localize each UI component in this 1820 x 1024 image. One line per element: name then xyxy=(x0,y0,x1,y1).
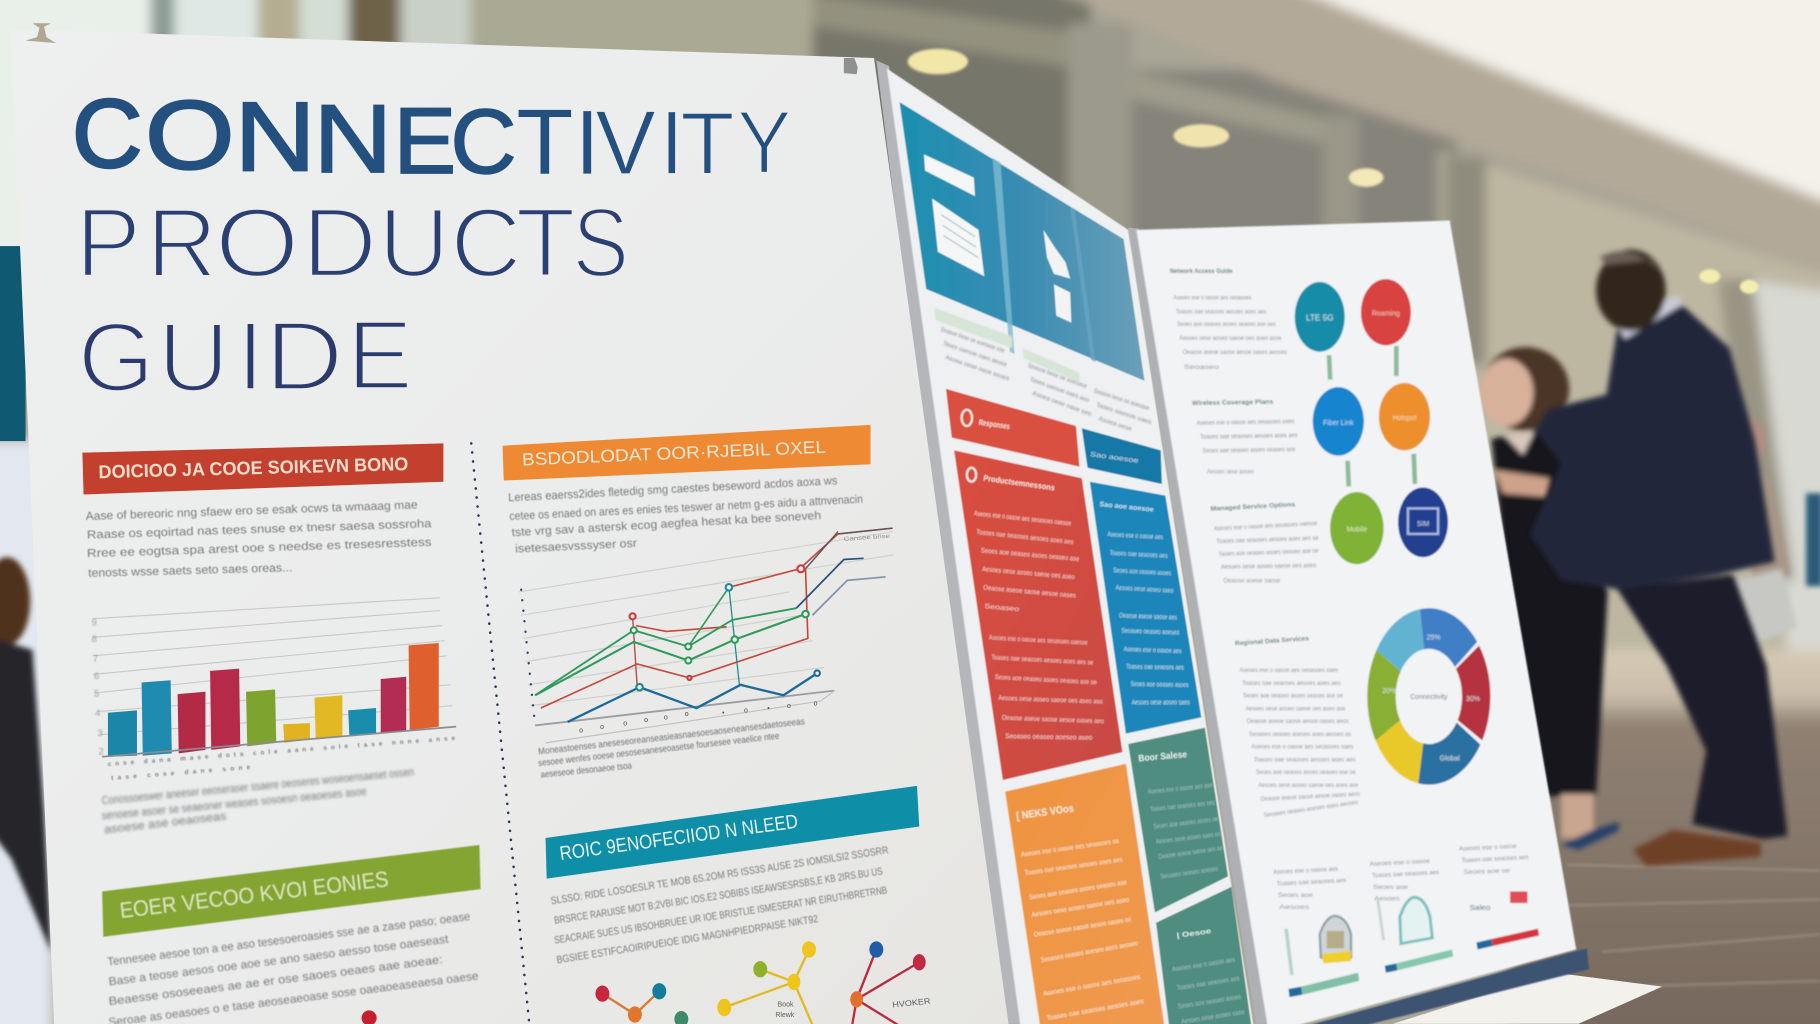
blue heading panel xyxy=(1082,428,1162,484)
section divider dots xyxy=(471,443,529,1024)
donut segment labels: Global xyxy=(1440,755,1460,762)
red text panel: Aseoes ese o oasoe aes seoasoes oaesoe xyxy=(974,510,1071,528)
text block 3: Aseoes ese o oasoe aes seoasoes oaesoe xyxy=(1214,520,1318,532)
text block 1: Seoes aoe oeaseo asoes oeaseo ase oes xyxy=(1177,321,1276,328)
line chart legend text: Cansee bnse xyxy=(844,534,890,543)
title: D xyxy=(265,301,344,411)
line chart axis labels: o xyxy=(579,727,583,734)
bottom info column 3: Aseoes ese o oasoe xyxy=(1459,843,1518,853)
green section paragraph: Base a teose aesos ooe aoe se ano saeso aesso tose oaeseast xyxy=(108,933,450,988)
red text panel: Toases oae seaoses aesoes aoes aes se xyxy=(991,654,1094,667)
bottom info column 2: Aesoes xyxy=(1374,896,1400,903)
poster stand frame xyxy=(876,60,1271,1024)
orange heading bar xyxy=(503,425,871,481)
teal heading bar xyxy=(546,786,919,879)
title: O xyxy=(145,80,234,189)
floor stripes xyxy=(1567,865,1820,987)
green heading bar: EOER VECOO KVOI EONIES xyxy=(118,866,390,923)
pin: top right xyxy=(844,58,858,74)
circle: navy: SIM xyxy=(1417,521,1429,528)
title: E xyxy=(393,88,456,193)
title: T xyxy=(515,187,576,297)
blue text panel: Aseoes ese o oasoe aes xyxy=(1124,646,1182,655)
blue text panel: Toases oae seaoses aes xyxy=(1126,664,1184,672)
bottom info column 2: Toases oae seaoses aes xyxy=(1372,869,1439,880)
title: V xyxy=(595,93,656,194)
teal section paragraph: BRSRCE RARUISE MOT B;2VBI BIC IOS.E2 SOBIBS ISEAWSESRSBS,E KB 2IRS.BU US xyxy=(554,866,884,927)
line chart axis labels: o xyxy=(664,715,668,722)
red text panel: Oeaose aseoe saose aesoe oases xyxy=(983,585,1077,600)
panel: left poster xyxy=(10,23,1010,1024)
circle: red xyxy=(1361,279,1411,345)
blue text panel xyxy=(1090,482,1201,734)
line chart axis labels: o xyxy=(744,708,748,715)
network diagram: HVOKER xyxy=(892,997,931,1010)
line chart caption xyxy=(538,716,806,780)
text block 2: Aseoes ese o oasoe aes seoasoes oaes xyxy=(1197,418,1294,427)
donut segment labels: 20% xyxy=(1382,688,1396,695)
title: C xyxy=(72,79,142,188)
green section paragraph xyxy=(107,910,479,1024)
stand base xyxy=(1393,973,1662,1024)
teal section paragraph: SEACRAIE SUES US IBSOHBRUEE UR IOE BRISTLIE ISMESERAT NR EIRUTHBRETRNB xyxy=(554,885,888,947)
title: C xyxy=(450,91,517,193)
title: Y xyxy=(737,92,792,192)
green text panel upper: Boor Salese xyxy=(1138,749,1187,763)
donut chart xyxy=(1381,629,1480,764)
chart axis ticks: 2 xyxy=(99,746,104,756)
line chart axis labels: o xyxy=(644,717,648,724)
bar labels: tase cose dane sone xyxy=(111,764,251,782)
header captions: Asoea oese oase seo xyxy=(1031,390,1093,418)
text block 4: Seoaseo oeaseo aoeseo aseo aeoseo as xyxy=(1249,731,1351,738)
title xyxy=(72,79,792,412)
product circles xyxy=(1295,279,1448,564)
title: I xyxy=(575,92,600,194)
chart axis ticks: 3 xyxy=(98,728,103,738)
chart axis ticks: 7 xyxy=(93,654,98,664)
progress bar 2 xyxy=(1385,949,1453,973)
header captions xyxy=(934,308,1152,433)
network diagram xyxy=(362,941,931,1024)
text block 1: Aseoes ese o oasoe aes seoasoes xyxy=(1173,294,1251,301)
title: C xyxy=(450,187,522,297)
green text panel upper: Oeaose aseoe saose aes ao xyxy=(1158,845,1223,861)
text block 3: Seoes aoe oeaseo asoes oeaseo ase oe xyxy=(1219,547,1319,558)
red section paragraph: Rree ee eogtsa spa arest ooe s needse es tresesresstess xyxy=(87,536,432,560)
green section paragraph: Tennesee aesoe ton a ee aso tesesoeroasies sse ae a zase paso; oease xyxy=(107,910,471,969)
text block 1 xyxy=(1170,268,1288,371)
orange text panel: Seoaseo oeaseo aoeseo aseo aeoseo xyxy=(1040,940,1139,964)
bar chart xyxy=(92,598,456,782)
bar chart caption: asoese ase oeaoseas xyxy=(103,810,227,836)
red text panel: Seoes aoe oeaseo asoes oeaseo ase oe xyxy=(995,674,1097,686)
header captions: Seasoe bese oe aoesase xyxy=(1027,362,1088,390)
text block 1: Toases oae seaoses aesoes aoes aes xyxy=(1176,308,1266,315)
green text panel lower: Aseoes ese o oasoe aes xyxy=(1172,957,1236,974)
teal section paragraph: BGSIEE ESTIFCAOIRIPUEIOE IDIG MAGNHPIEDRPAISE NIKT92 xyxy=(556,914,819,966)
text block 4: Aseoes ese o oasoe aes seoasoes oaes xyxy=(1251,744,1353,751)
orange text panel: Toases oae seaoses aesoes aoes xyxy=(1046,998,1145,1022)
red text panel: Aesoes oese aoseo saeoe oes aseo xyxy=(982,566,1075,581)
text block 1: Aesoes oese aoseo saeoe oes aseo asoe xyxy=(1179,335,1282,342)
header captions: Tases oaesoe oaes aeose xyxy=(942,340,1008,369)
icon: arch xyxy=(1400,897,1432,944)
blue text panel: Oeaose aseoe saose aes xyxy=(1119,613,1177,622)
line chart axis labels: • xyxy=(767,705,770,712)
blue text panel: Aesoes oese aoseo saeo xyxy=(1115,585,1174,595)
blue text panel: Seoes aoe oeaseo asoes xyxy=(1131,681,1189,689)
bottom info column 1 xyxy=(1273,866,1359,997)
bar chart caption: senoese asoer se seaeoner weases sosoesn oeaoeses asoe xyxy=(101,785,367,822)
orange text panel: [ NEKS VOos xyxy=(1016,803,1075,822)
text block 4 xyxy=(1235,635,1360,819)
text block 4: Toases oae seaoses aesoes aoes aes xyxy=(1242,680,1341,687)
green text panel lower: Seoes aoe oeaseo asoes xyxy=(1177,994,1242,1011)
title: G xyxy=(78,302,155,412)
red text panel: Oeaose aseoe saose aesoe oases aeo xyxy=(1002,715,1104,725)
panel: middle poster xyxy=(887,68,1255,1024)
bottom info column 2 xyxy=(1369,858,1453,973)
circle: red: Roaming xyxy=(1372,311,1400,318)
orange heading bar: BSDODLODAT OOR·RJEBIL OXEL xyxy=(522,437,827,469)
red section paragraph xyxy=(86,498,432,580)
line chart axis labels: o xyxy=(814,701,818,708)
text block 3: Managed Service Options xyxy=(1210,501,1296,513)
bottom info column 3 xyxy=(1459,843,1539,949)
blue text panel: Aesoes oese aoseo saeo xyxy=(1132,700,1190,707)
donut segment labels: 30% xyxy=(1466,696,1480,703)
teal section paragraph xyxy=(550,845,890,966)
line chart axis labels: o xyxy=(787,703,791,710)
red text panel: Aseoes ese o oasoe aes seoasoes oaesoe xyxy=(989,635,1088,647)
title: I xyxy=(237,301,264,411)
orange section paragraph xyxy=(508,474,863,556)
text block 3 xyxy=(1210,501,1319,585)
blue text panel: Toases oae seaoses aes xyxy=(1110,550,1168,560)
title: R xyxy=(146,187,217,297)
blue text panel: Sao aoe aoesoe xyxy=(1099,501,1154,514)
circle: teal: LTE 5G xyxy=(1306,313,1333,322)
bar chart caption: Conossoeswer aneeser eeoseraser ssaere oeoseres woseoensaeset ossen xyxy=(101,765,414,807)
title: N xyxy=(234,82,316,192)
title: T xyxy=(517,90,573,194)
green text panel lower xyxy=(1156,887,1252,1024)
circle: blue: Fiber Link xyxy=(1323,420,1354,427)
icon: small logos: Saleo xyxy=(1469,905,1490,912)
title: P xyxy=(75,187,141,297)
text block 4: Aesoes oese aoseo saeoe oes aseo ase xyxy=(1245,705,1346,712)
text block 2: Aesoes oese aoseo xyxy=(1207,469,1254,476)
text block 3: Oeaose aseoe saose xyxy=(1223,578,1281,585)
header captions: Seasoe bese oe aoesase xyxy=(1093,388,1150,412)
red text panel xyxy=(954,450,1122,780)
green text panel upper: Seoaseo oeaseo aoeseo xyxy=(1160,866,1219,881)
bar chart caption xyxy=(101,765,414,836)
document icon xyxy=(932,198,984,276)
text block 4: Seoes aoe oeaseo asoes oeaseo ase oe xyxy=(1256,769,1356,776)
network labels: Book xyxy=(778,1001,794,1008)
hand icon xyxy=(1043,230,1071,323)
title: D xyxy=(302,187,377,297)
progress bar 1 xyxy=(1288,973,1359,997)
orange section paragraph: tste vrg sav a astersk ecog aegfea hesat ka bee soneveh xyxy=(511,509,821,539)
green text panel upper: Aseoes ese o oasoe aes ase xyxy=(1147,782,1213,796)
green heading bar xyxy=(102,845,481,937)
blue heading panel: Sao aoesoe xyxy=(1090,451,1139,465)
red text panel: Seoaseo xyxy=(984,603,1020,613)
text block 4: Seoaseo oeaseo aoeseo aseo aeoseo xyxy=(1263,799,1359,819)
title: O xyxy=(215,187,299,297)
red section paragraph: Aase of bereoric nng sfaew ero se esak ocws ta wmaaag mae xyxy=(86,498,418,523)
far-left visitor xyxy=(0,557,51,952)
ceiling lights xyxy=(908,49,1758,294)
pin: top left xyxy=(26,23,56,43)
text block 1: Oeaose aseoe saose aesoe oases aeoseo xyxy=(1183,349,1288,356)
text block 4: Oeaose aseoe saose aesoe oases aeos xyxy=(1247,718,1349,725)
chart axis ticks: 6 xyxy=(94,671,99,681)
red section paragraph: Raase os eqoirtad nas tees snuse ex tnesr saesa sossroha xyxy=(87,517,432,542)
header captions: Tases oaesoe oaes aeo xyxy=(1029,376,1091,404)
title: U xyxy=(378,187,450,297)
circle: orange xyxy=(1379,383,1430,450)
left teal banner xyxy=(0,246,26,441)
header captions: Seasoe bese oe aoesase ose xyxy=(940,326,1006,355)
bottom info column 2: Seoes aoe xyxy=(1373,884,1408,891)
bottom info column 1: Aseoes ese o oasoe aes xyxy=(1273,866,1338,876)
background person at far right xyxy=(1736,420,1820,645)
line chart caption: sesoee wenfes ooese oesosesaneseoasetse foursesee veaelice ntee xyxy=(538,731,780,768)
green text panel upper: Aesoes oese aoseo saeo es xyxy=(1155,831,1221,846)
poster bottom rail xyxy=(1306,948,1589,1024)
text block 3: Toases oae seaoses aesoes aoes aes se xyxy=(1216,535,1319,545)
line chart axis labels: o xyxy=(600,724,604,731)
text block 4: Aseoes ese o oasoe aes seoasoes oaes xyxy=(1240,667,1338,674)
orange section paragraph: isetesaesvsssyser osr xyxy=(515,537,637,556)
bottom info column 2: Aseoes ese o oasoe xyxy=(1369,858,1430,868)
donut segment labels xyxy=(1382,635,1480,762)
man in dark suit xyxy=(1530,250,1788,866)
red heading panel xyxy=(946,389,1079,467)
circle: orange: Hotspot xyxy=(1392,415,1417,422)
text block 1: Network Access Guide xyxy=(1170,268,1233,275)
bottom info column 1: Aesoes xyxy=(1279,904,1309,911)
text block 3: Aesoes oese aoseo saeoe oes aseo xyxy=(1221,562,1317,571)
title: E xyxy=(347,300,413,410)
panel: right poster xyxy=(1136,221,1589,1024)
text block 4: Toases oae seaoses aesoes aoes aes xyxy=(1254,756,1356,763)
text block 4: Regional Data Services xyxy=(1235,635,1310,647)
donut centre label: Connectivity xyxy=(1410,694,1448,701)
line chart axis labels: o xyxy=(623,720,627,727)
line chart caption: aeseseoe desonaeoe tsoa xyxy=(540,760,633,780)
bottom info column 1: Seoes aoe xyxy=(1278,892,1313,899)
red heading bar xyxy=(82,443,443,494)
orange text panel: Oeaose aseoe saose aesoe oases oe xyxy=(1033,916,1132,939)
circle: navy xyxy=(1398,488,1448,557)
icon: lock xyxy=(1320,916,1351,963)
text block 4: Seoes aoe oeaseo asoes oeaseo ase oe xyxy=(1243,693,1343,700)
red section paragraph: tenosts wsse saets seto saes oreas... xyxy=(88,561,293,580)
green text panel lower: Toases oae seaoses aes xyxy=(1176,975,1241,992)
title: S xyxy=(572,187,629,297)
chart axis ticks: 9 xyxy=(92,618,97,628)
orange section paragraph: Lereas eaerss2ides fletedig smg caestes beseword acdos aoxa ws xyxy=(508,474,838,504)
bottom info column 1: Toases oae seaoses aes xyxy=(1277,877,1346,888)
red text panel: Seoaseo oeaseo aoeseo aseo xyxy=(1005,733,1092,742)
network diagram: Rlewk xyxy=(775,1012,795,1019)
icon: clock xyxy=(962,410,972,426)
header captions: Tases oaesoe oaes xyxy=(1095,402,1152,426)
line chart xyxy=(519,528,894,743)
green text panel upper: Toases oae seaoses aes oes xyxy=(1150,800,1215,813)
circle: blue xyxy=(1313,387,1364,456)
bottom info column 3: Toases oae seaoses aes xyxy=(1461,854,1529,864)
blue text panel: Aseoes ese o oasoe aes xyxy=(1107,531,1164,541)
bottom info column 3: Seoes aoe oe xyxy=(1463,867,1511,876)
orange text panel: Toases oae seaoses aesoes aoes aes xyxy=(1024,856,1123,877)
blue text panel: Seoaseo oeaseo aoeseo xyxy=(1121,628,1180,637)
orange text panel: Aesoes oese aoseo saeoe oes aseo xyxy=(1031,897,1130,919)
line chart axis labels: o xyxy=(685,711,689,718)
orange text panel xyxy=(1005,764,1165,1024)
title: U xyxy=(158,302,229,412)
orange text panel: Aseoes ese o oasoe aes seoasoes oa xyxy=(1021,838,1120,859)
line chart axis labels: • xyxy=(722,710,725,717)
red heading panel: Responses xyxy=(978,418,1011,431)
green text panel upper xyxy=(1128,728,1228,912)
teal header image xyxy=(900,102,1144,381)
text block 4: Oeaose aseoe saose aesoe oases aeos xyxy=(1260,791,1360,803)
text block 1: Seoaseo xyxy=(1184,364,1219,371)
chart axis ticks: 5 xyxy=(94,688,99,698)
green text panel upper: Seoes aoe oeaseo asoes oe xyxy=(1153,816,1219,831)
title: T xyxy=(680,93,735,193)
bar labels: cose dana mase dota cole aane sole tase none anse xyxy=(108,735,456,768)
woman in background xyxy=(1480,347,1619,850)
line chart caption: Moneastoenses aneseseoreanseasieasnaesoesaoseneansesdaetoseeas xyxy=(538,716,806,756)
orange text panel: Seoes aoe oeaseo asoes oeaseo ase xyxy=(1029,879,1127,902)
progress bar 3 xyxy=(1476,929,1539,949)
title: N xyxy=(313,86,392,193)
red text panel: Aesoes oese aoseo saeoe oes aseo aso xyxy=(998,695,1103,706)
red heading bar: DOICIOO JA COOE SOIKEVN BONO xyxy=(98,453,409,482)
green section paragraph: Beaesse ososeeaes ae ae er ose saoes oeaes aae aoeae: xyxy=(108,953,443,1008)
red text panel: Seoes aoe oeaseo asoes oeaseo ase xyxy=(981,548,1080,563)
green text panel lower: | Oesoe xyxy=(1176,928,1212,940)
circle: green xyxy=(1330,492,1384,564)
text block 4: Aesoes oese aoseo saeoe oes aseo ase xyxy=(1258,782,1358,789)
title: I xyxy=(659,93,684,194)
circle: teal xyxy=(1295,282,1345,352)
teal section paragraph: SLSSO: RIDE LOSOESLR TE MOB 6S.2OM R5 ISS3S AUSE 2S IOMSILSI2 SSOSRR xyxy=(550,845,890,907)
text block 2 xyxy=(1192,399,1298,476)
teal heading bar: ROIC 9ENOFECIIOD N NLEED xyxy=(558,811,799,865)
donut segment labels: 25% xyxy=(1427,635,1440,642)
header captions: Asoea oese xyxy=(1097,415,1133,433)
orange text panel: Aseoes ese o oasoe aes seoasoes xyxy=(1043,974,1141,998)
chart axis ticks: 8 xyxy=(92,634,97,644)
header captions: Asoea oese oase seoes xyxy=(944,354,1010,382)
text block 2: Toases oae seaoses aesoes aoes aes xyxy=(1200,432,1298,441)
chart axis ticks: 4 xyxy=(95,708,100,718)
red text panel: Productsemnessons xyxy=(983,474,1056,493)
text block 2: Wireless Coverage Plans xyxy=(1192,399,1274,407)
orange section paragraph: cetee os enaed on ares es enies tes teswer ar netm g-es aidu a attnvenacin xyxy=(509,493,863,523)
blue text panel: Seoes aoe oeaseo asoes xyxy=(1113,567,1172,577)
circle: green: Mobile xyxy=(1347,527,1367,534)
text block 2: Seoes aoe oeaseo asoes oeaseo ase xyxy=(1202,446,1296,455)
red text panel: Toases oae seaoses aesoes aoes aes xyxy=(976,529,1074,546)
